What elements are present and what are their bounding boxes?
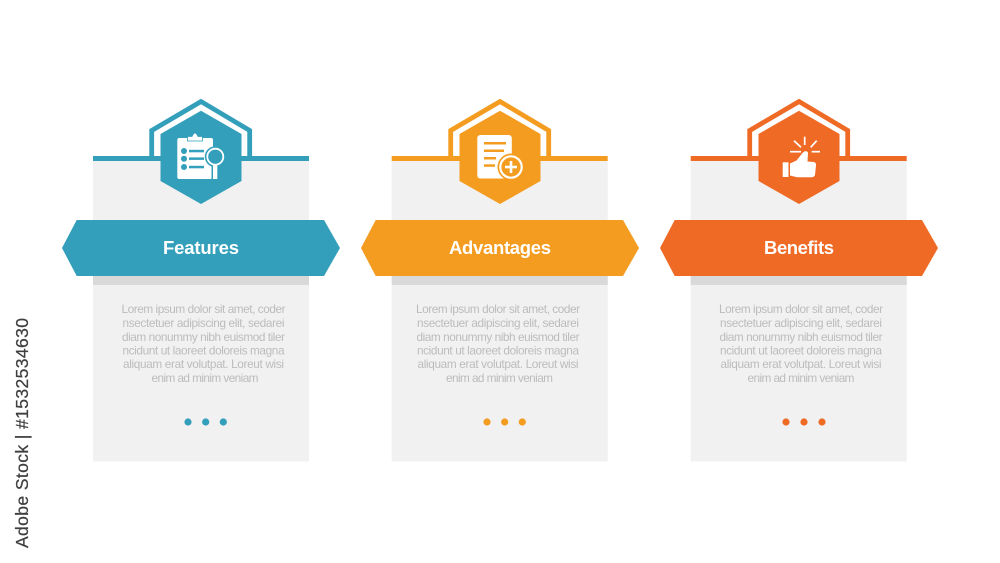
hexagon frame <box>451 102 549 157</box>
text block <box>416 302 580 385</box>
icon: thumbs up <box>783 137 820 177</box>
text block: ncidunt ut laoreet doloreis magna <box>122 344 285 358</box>
banner: advantages: Advantages <box>449 237 551 258</box>
card body <box>93 160 309 462</box>
text block: enim ad minim veniam <box>152 371 259 385</box>
banner shadow <box>392 276 608 285</box>
text block: diam nonummy nibh euismod tiler <box>122 330 285 344</box>
text block <box>719 302 883 385</box>
banner: advantages <box>361 220 639 276</box>
side credit text: Adobe Stock | #1532534630 <box>12 318 32 548</box>
banner: features <box>62 220 340 276</box>
top rule <box>392 156 608 161</box>
banner: features: Features <box>163 237 239 258</box>
text block: aliquam erat volutpat. Loreut wisi <box>418 357 578 371</box>
hexagon frame <box>750 102 848 157</box>
hexagon backing <box>152 101 250 156</box>
dots <box>782 418 826 426</box>
text block: nsectetuer adipiscing elit, sedarei <box>122 316 284 330</box>
text block: nsectetuer adipiscing elit, sedarei <box>720 316 882 330</box>
text block: Lorem ipsum dolor sit amet, coder <box>416 302 580 316</box>
panel: features <box>62 101 340 462</box>
dots <box>483 418 526 426</box>
text block: aliquam erat volutpat. Loreut wisi <box>720 357 882 371</box>
dots <box>184 418 227 426</box>
banner: benefits <box>660 220 938 276</box>
card body <box>392 160 608 462</box>
text block: enim ad minim veniam <box>446 371 553 385</box>
hexagon backing <box>750 101 848 156</box>
text block: diam nonummy nibh euismod tiler <box>720 330 883 344</box>
panel: benefits <box>660 101 938 462</box>
hexagon frame <box>152 102 250 157</box>
hexagon backing <box>451 101 549 156</box>
banner: benefits: Benefits <box>764 237 834 258</box>
banner shadow <box>691 276 907 285</box>
text block: diam nonummy nibh euismod tiler <box>416 330 580 344</box>
text block: Lorem ipsum dolor sit amet, coder <box>719 302 883 316</box>
hexagon badge <box>160 111 242 204</box>
top rule <box>691 156 907 161</box>
hexagon badge <box>460 111 540 204</box>
hexagon badge <box>758 111 840 204</box>
text block: nsectetuer adipiscing elit, sedarei <box>417 316 579 330</box>
icon: document with plus <box>477 135 524 180</box>
text block <box>122 302 286 385</box>
top rule <box>93 156 309 161</box>
text block: enim ad minim veniam <box>748 371 855 385</box>
text block: ncidunt ut laoreet doloreis magna <box>417 344 579 358</box>
card body <box>691 160 907 462</box>
icon: clipboard with magnifier <box>177 133 226 180</box>
text block: aliquam erat volutpat. Loreut wisi <box>123 357 284 371</box>
text block: ncidunt ut laoreet doloreis magna <box>720 344 882 358</box>
panel: advantages <box>361 101 639 462</box>
text block: Lorem ipsum dolor sit amet, coder <box>122 302 286 316</box>
banner shadow <box>93 276 309 285</box>
